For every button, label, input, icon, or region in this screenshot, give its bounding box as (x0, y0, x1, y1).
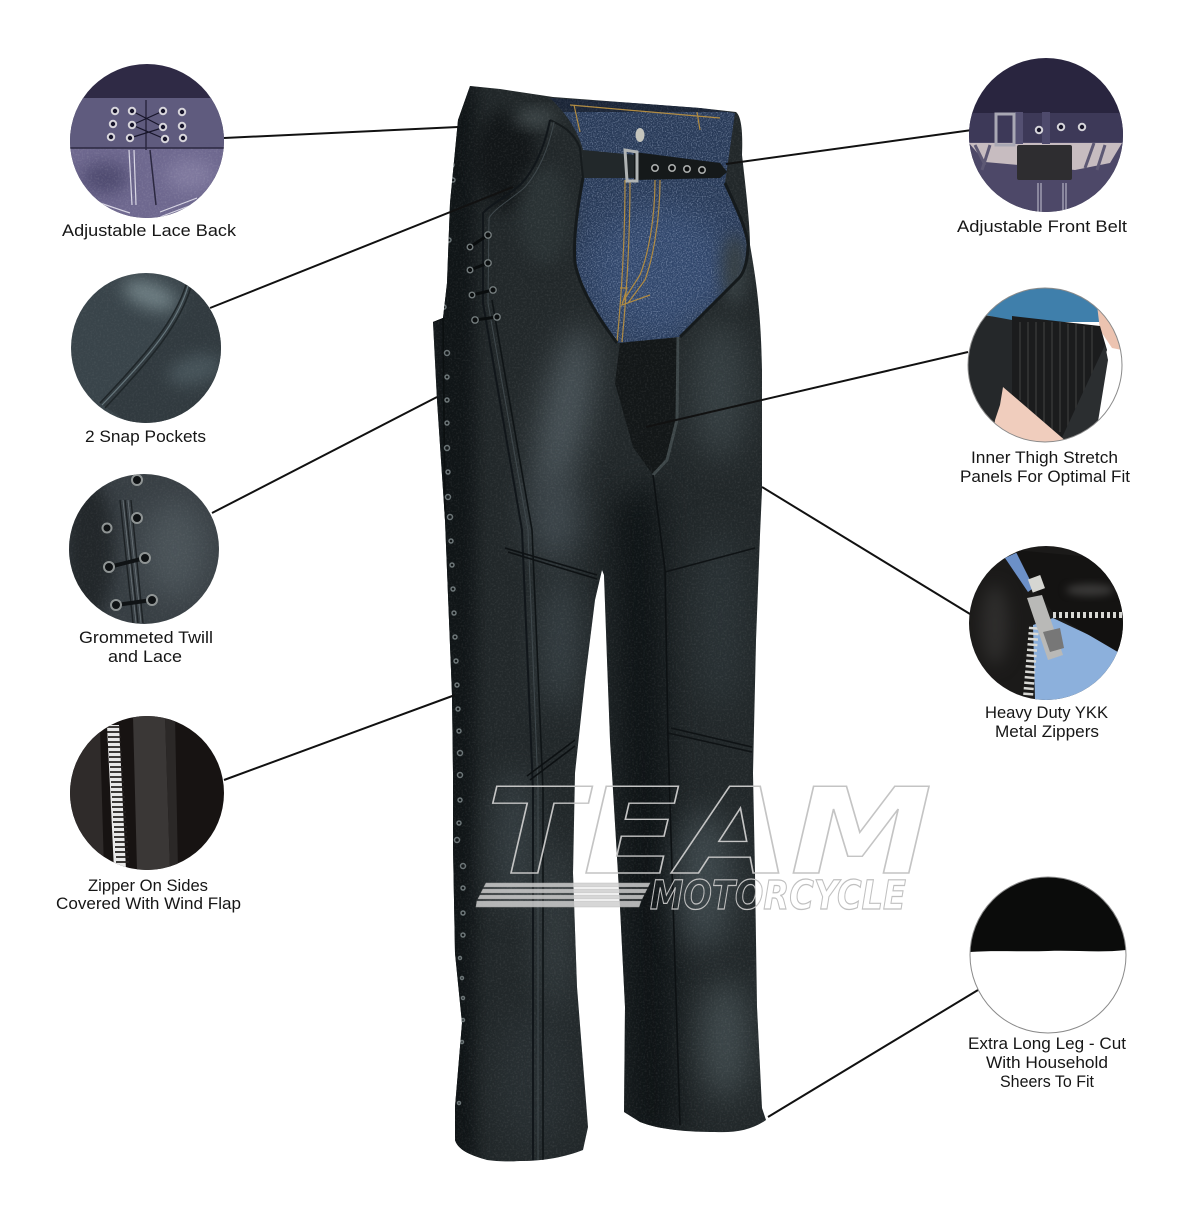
icon: belt photo (969, 58, 1123, 212)
label: Heavy Duty YKK (985, 704, 1108, 722)
leather shading (430, 80, 476, 1170)
label: With Household (986, 1054, 1108, 1072)
label: Zipper On Sides (88, 877, 208, 895)
icon: stretch panel photo (968, 288, 1122, 442)
leader line (762, 487, 970, 614)
label (968, 1035, 1126, 1091)
watermark: TEAM MOTORCYCLE logo: TEAM (486, 764, 932, 902)
panel: 2 snap pockets (70, 187, 513, 446)
belt (583, 150, 727, 178)
panel: extra long leg (768, 877, 1126, 1117)
leader line (212, 397, 437, 513)
icon: lace back photo (70, 64, 224, 218)
leader line (726, 130, 972, 164)
leader line (210, 187, 513, 308)
denim jeans (550, 98, 746, 343)
label: Inner Thigh Stretch (971, 449, 1118, 467)
leader line (768, 990, 978, 1117)
label (56, 877, 241, 913)
label (960, 449, 1130, 486)
label (79, 629, 213, 666)
label: 2 Snap Pockets (85, 428, 206, 446)
panel: inner thigh stretch panels (646, 288, 1130, 486)
pocket and seams (550, 120, 583, 178)
circle outline (968, 288, 1122, 442)
icon: leg hem photo (970, 878, 1126, 952)
label: Covered With Wind Flap (56, 895, 241, 913)
lacing grommets (467, 232, 500, 323)
label: Adjustable Lace Back (62, 222, 237, 240)
leader line (646, 352, 968, 427)
icon: metal zipper photo (969, 546, 1125, 700)
panel: adjustable front belt (726, 58, 1127, 236)
panel: grommeted twill and lace (66, 397, 437, 666)
icon: pocket seam photo (70, 272, 226, 424)
watermark: TEAM MOTORCYCLE logo: MOTORCYCLE (650, 873, 906, 919)
leader line (224, 127, 458, 138)
label: and Lace (108, 648, 182, 666)
inner thigh stretch panel (615, 337, 680, 475)
label: Adjustable Front Belt (957, 218, 1127, 236)
panel: side zipper with wind flap (56, 695, 455, 913)
label: Extra Long Leg - Cut (968, 1035, 1126, 1053)
label (985, 704, 1108, 741)
side grommets (442, 163, 466, 1104)
belt hardware (625, 128, 705, 181)
label: Metal Zippers (995, 723, 1099, 741)
panel: adjustable lace back (62, 64, 458, 240)
icon: grommets photo (66, 474, 219, 624)
circle outline (970, 877, 1126, 1033)
panel: YKK metal zippers (762, 487, 1125, 741)
leader line (224, 695, 455, 780)
label: Grommeted Twill (79, 629, 213, 647)
icon: zipper photo (70, 716, 224, 870)
label: Sheers To Fit (1000, 1073, 1094, 1091)
label: Panels For Optimal Fit (960, 468, 1130, 486)
main image: black leather chaps over jeans (433, 86, 766, 1162)
